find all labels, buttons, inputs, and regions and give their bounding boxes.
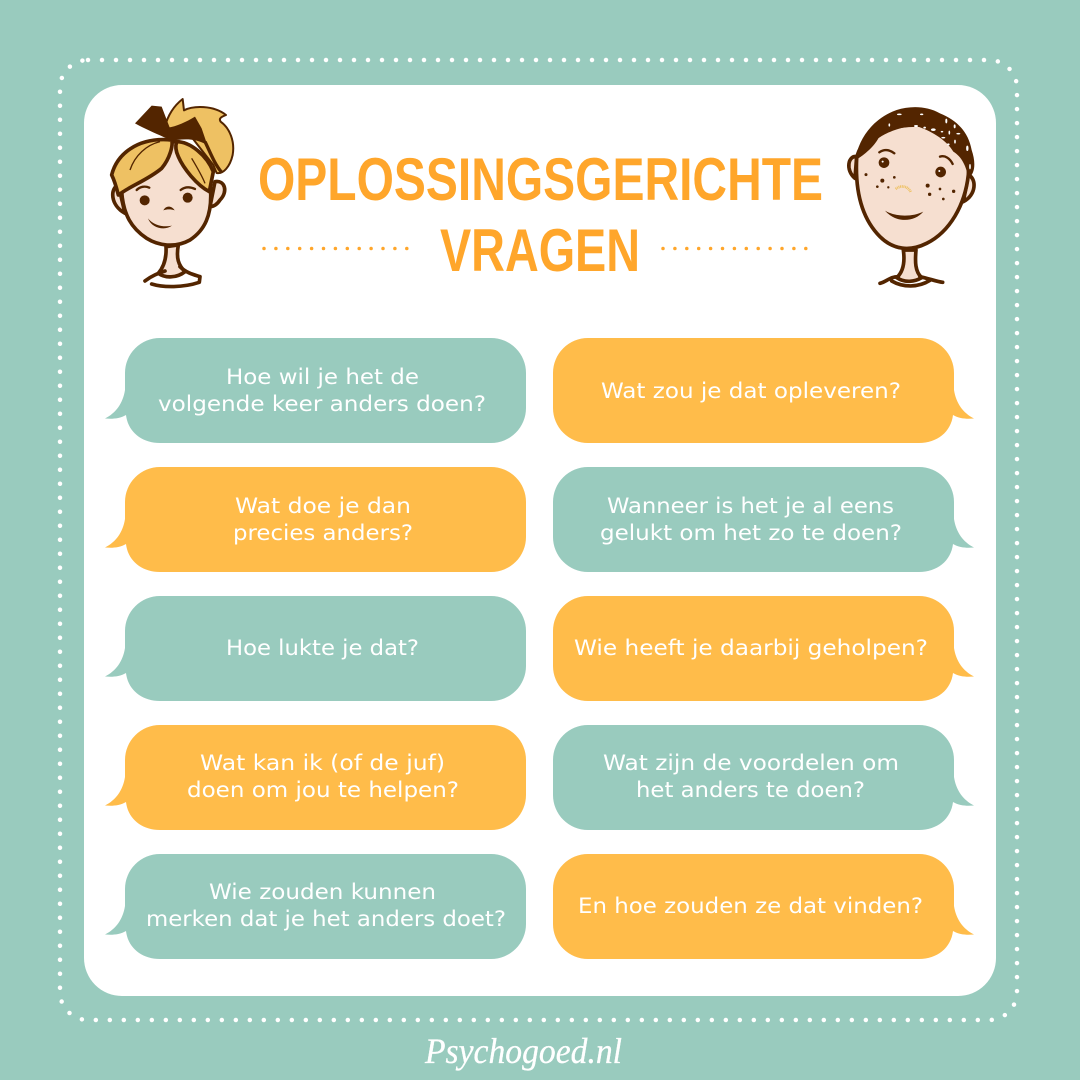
title: VRAGEN [440,217,640,284]
speech bubble: Wat zou je dat opleveren?: Wat zou je dat opleveren? [601,379,901,403]
speech bubble: Wanneer is het je al eens gelukt om het zo te doen?: gelukt om het zo te doen? [600,521,902,545]
speech bubble: Hoe wil je het de volgende keer anders doen?: volgende keer anders doen? [158,392,486,416]
speech bubble: Wat doe je dan precies anders? [105,467,526,572]
speech bubble: Wat zijn de voordelen om het anders te doen?: het anders te doen? [636,778,865,802]
speech bubble: Wanneer is het je al eens gelukt om het zo te doen? [553,467,974,572]
panel: speech bubbles right column [553,338,974,959]
speech bubble: Wie heeft je daarbij geholpen? [553,596,974,701]
speech bubble: Wat doe je dan precies anders?: precies anders? [233,521,413,545]
icon: boy with curly hair and freckles [849,107,974,286]
speech bubble: Wat kan ik (of de juf) doen om jou te helpen?: doen om jou te helpen? [187,778,459,802]
icon: girl with blonde hair [112,99,233,287]
speech bubble: Wie heeft je daarbij geholpen?: Wie heeft je daarbij geholpen? [574,636,928,660]
speech bubble: En hoe zouden ze dat vinden?: En hoe zouden ze dat vinden? [578,894,923,918]
speech bubble: Wie zouden kunnen merken dat je het anders doet?: merken dat je het anders doet? [146,907,506,931]
footer brand text: Psychogoed.nl [424,1031,622,1071]
speech bubble: Wat kan ik (of de juf) doen om jou te helpen?: Wat kan ik (of de juf) [200,751,445,775]
speech bubble: Wie zouden kunnen merken dat je het anders doet? [105,854,526,959]
panel: white card [84,85,996,996]
speech bubble: Hoe lukte je dat? [105,596,526,701]
speech bubble: Hoe wil je het de volgende keer anders doen? [105,338,526,443]
speech bubble: En hoe zouden ze dat vinden? [553,854,974,959]
speech bubble: Wat zou je dat opleveren? [553,338,974,443]
title [258,146,823,284]
speech bubble: Wie zouden kunnen merken dat je het anders doet?: Wie zouden kunnen [209,880,436,904]
speech bubble: Hoe wil je het de volgende keer anders doen?: Hoe wil je het de [226,365,419,389]
speech bubble: Wat zijn de voordelen om het anders te doen?: Wat zijn de voordelen om [603,751,899,775]
speech bubble: Wat doe je dan precies anders?: Wat doe je dan [235,494,411,518]
speech bubble: Wat kan ik (of de juf) doen om jou te helpen? [105,725,526,830]
title: OPLOSSINGSGERICHTE [258,146,823,213]
speech bubble: Wanneer is het je al eens gelukt om het zo te doen?: Wanneer is het je al eens [607,494,894,518]
speech bubble: Hoe lukte je dat?: Hoe lukte je dat? [226,636,419,660]
panel: speech bubbles left column [105,338,526,959]
speech bubble: Wat zijn de voordelen om het anders te doen? [553,725,974,830]
